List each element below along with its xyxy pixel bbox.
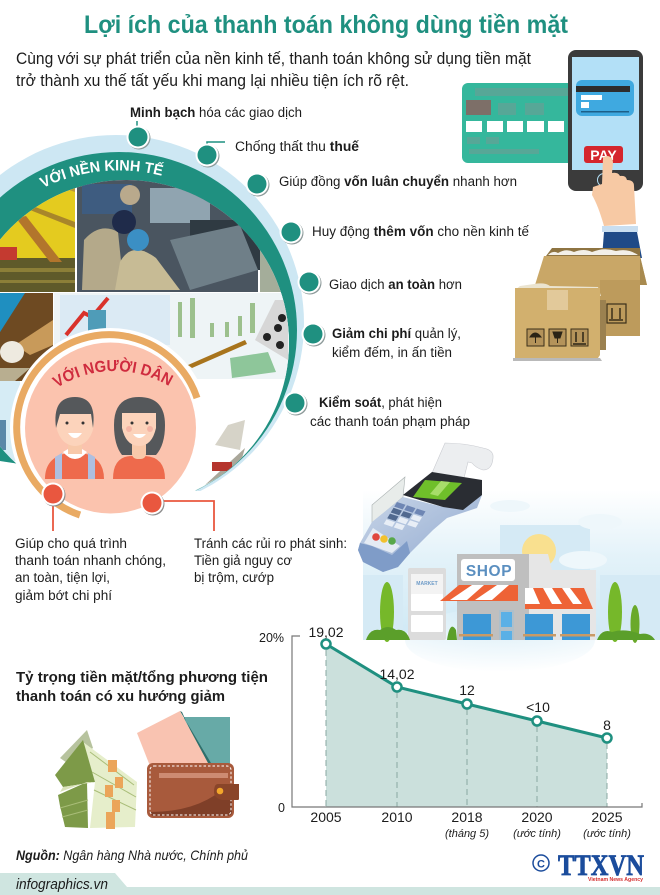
logo: TTXVN: Vietnam News Agency: [588, 877, 643, 883]
people benefits text left: giảm bớt chi phí: [15, 588, 112, 603]
icon: wallet: [137, 711, 239, 818]
chart heading: Tỷ trọng tiền mặt/tổng phương tiện: [16, 670, 268, 686]
outer light blue ring: [0, 135, 304, 511]
icon: cardboard boxes: [513, 248, 647, 361]
economy benefits text: Huy động thêm vốn cho nền kinh tế: [312, 224, 529, 239]
values: 12: [459, 682, 475, 698]
year notes: (ước tính): [583, 828, 631, 840]
shop building: [440, 554, 596, 640]
receipt paper: [432, 443, 493, 482]
illustration: shop street: [363, 490, 660, 672]
years: 2018: [451, 809, 483, 825]
icon: credit card and phone payment: PAY: [590, 147, 617, 163]
line: [326, 644, 607, 738]
values: 19,02: [308, 624, 344, 640]
values: 8: [603, 717, 611, 733]
economy benefits text: Chống thất thu thuế: [235, 139, 360, 154]
footer band: [0, 873, 660, 895]
title: Lợi ích của thanh toán không dùng tiền mặt: [84, 11, 569, 39]
icon: woman: [113, 397, 165, 479]
area: [326, 644, 607, 807]
years: 2010: [381, 809, 413, 825]
icon: money stack: [55, 730, 137, 829]
y axis labels: 20%: [259, 631, 284, 645]
markers: [322, 640, 612, 742]
logo: TTXVN: [533, 849, 644, 883]
card: [372, 477, 405, 523]
people benefits text right: [194, 536, 347, 585]
year notes: (ước tính): [513, 828, 561, 840]
economy benefits text: Giúp đồng vốn luân chuyển nhanh hơn: [279, 174, 517, 189]
intro text: trở thành xu thế tất yếu khi mang lại nhiều tiện ích rõ rệt.: [16, 71, 409, 90]
dashed guides: [326, 650, 607, 807]
year notes: [445, 828, 631, 840]
economy benefits text: Kiểm soát, phát hiện: [319, 395, 442, 410]
year notes: (tháng 5): [445, 828, 489, 840]
economy connector dots: [126, 121, 326, 416]
green ring: [0, 152, 297, 508]
photo collage: [0, 180, 289, 490]
y axis labels: 0: [278, 801, 285, 815]
people benefits text left: thanh toán nhanh chóng,: [15, 553, 166, 568]
economy benefits text: Giảm chi phí quản lý,: [332, 326, 461, 341]
body: [358, 495, 482, 572]
people benefits text right: Tránh các rủi ro phát sinh:: [194, 536, 347, 551]
market building: MARKET: [416, 581, 438, 587]
chart heading: thanh toán có xu hướng giảm: [16, 689, 225, 705]
years: 2020: [521, 809, 553, 825]
y axis labels: [259, 631, 285, 815]
shop building: SHOP: [466, 563, 512, 580]
source: Nguồn: Ngân hàng Nhà nước, Chính phủ: [16, 847, 248, 863]
economy circle: [0, 135, 304, 491]
intro text: [16, 49, 531, 90]
intro text: Cùng với sự phát triển của nền kinh tế, thanh toán không sử dụng tiền mặt: [16, 49, 531, 68]
economy benefits text: Minh bạch hóa các giao dịch: [130, 105, 302, 120]
label: với nền kinh tế: VỚI NỀN KINH TẾ: [38, 160, 164, 186]
screen frame: [403, 472, 482, 510]
logo: TTXVN: TTXVN: [558, 849, 644, 882]
economy benefits text: các thanh toán phạm pháp: [310, 414, 470, 429]
people benefits text left: [15, 536, 166, 603]
people connectors and dots: [42, 482, 214, 531]
chart heading: [16, 670, 268, 705]
logo: TTXVN: C: [537, 858, 545, 870]
axes: [292, 636, 642, 807]
years: [310, 809, 623, 825]
values: 14,02: [379, 666, 415, 682]
footer site name: infographics.vn: [16, 876, 108, 893]
market building: [408, 568, 446, 640]
people benefits text left: Giúp cho quá trình: [15, 536, 127, 551]
trees: [366, 582, 655, 643]
people benefits text left: an toàn, tiện lợi,: [15, 570, 110, 585]
values: <10: [526, 699, 550, 715]
keypad: [384, 502, 426, 533]
label: với người dân: VỚI NGƯỜI DÂN: [52, 357, 174, 386]
values: [308, 624, 611, 733]
economy benefits text: [130, 105, 529, 429]
years: 2005: [310, 809, 342, 825]
icon: card terminal: [358, 443, 493, 572]
line chart: [259, 624, 642, 840]
years: 2025: [591, 809, 623, 825]
people benefits text right: Tiền giả nguy cơ: [194, 553, 292, 568]
icon: man: [45, 397, 104, 479]
economy benefits text: Giao dịch an toàn hơn: [329, 277, 462, 292]
people benefits text right: bị trộm, cướp: [194, 570, 274, 585]
people circle: [10, 328, 200, 518]
economy benefits text: kiểm đếm, in ấn tiền: [332, 345, 452, 360]
icon: credit card and phone payment: [462, 50, 643, 258]
